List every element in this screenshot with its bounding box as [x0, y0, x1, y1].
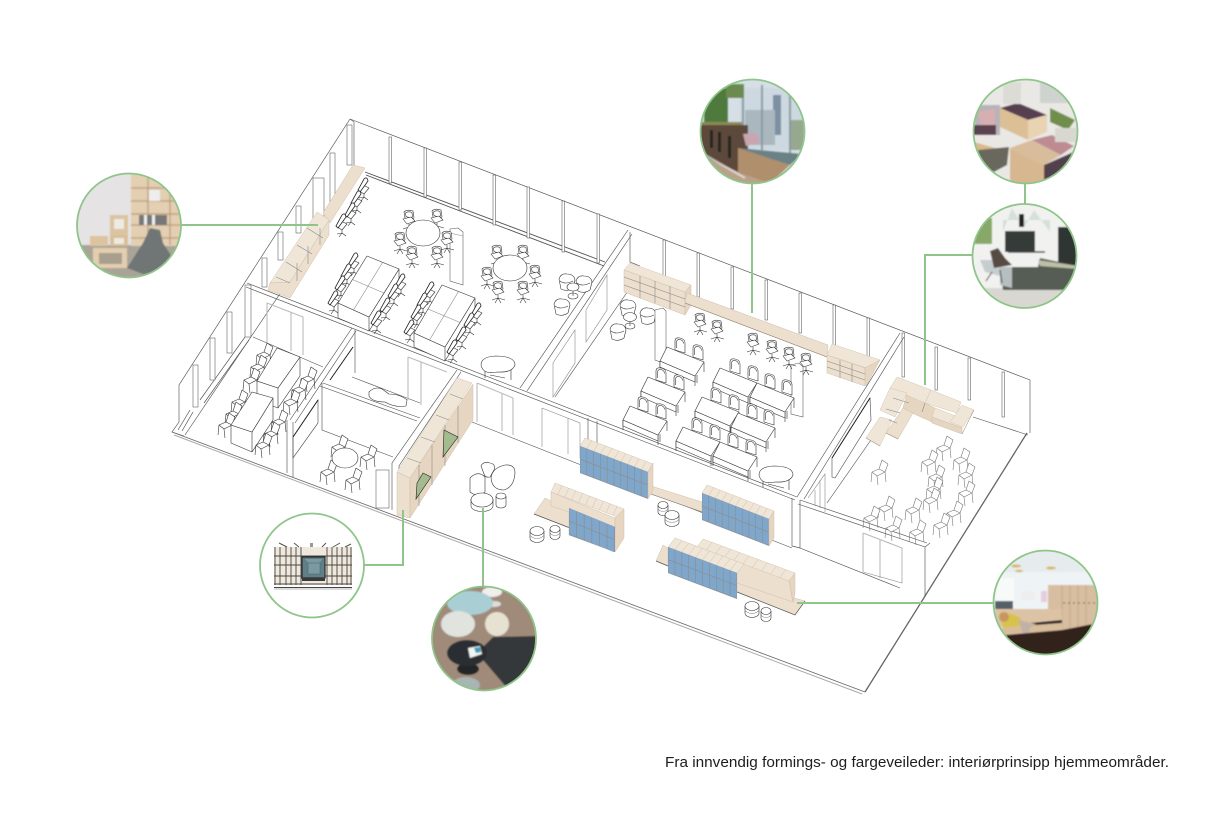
- strip bench between lockers: [648, 485, 702, 512]
- connector lines: [181, 183, 1025, 603]
- outer walls and floor edge: [172, 119, 1030, 694]
- oval table room 2: [759, 466, 793, 490]
- round table B with chairs: [481, 245, 542, 303]
- column room 1: [450, 228, 463, 285]
- room 2 wood cabinet left: [624, 263, 691, 315]
- photo: bookcase and bean bag: [76, 172, 182, 278]
- wood storage wall with green windows: [397, 378, 473, 518]
- locker block 1: [580, 438, 653, 499]
- task chairs room 2: [694, 313, 813, 375]
- room 2 wood cabinet right: [827, 344, 880, 386]
- photo: person on bench by lockers: [992, 550, 1100, 660]
- facade panel: [274, 543, 352, 589]
- window mullions: [193, 125, 1004, 417]
- floor plan: isometric drawing of the home area: [172, 119, 1030, 694]
- locker block 4 with bench: [656, 538, 805, 615]
- long table 1 with chairs: [328, 253, 406, 334]
- photo: workstation with green seating: [970, 202, 1080, 312]
- meeting room sofa: [369, 388, 407, 406]
- illustration: facade with window: [260, 514, 364, 618]
- room 2 window bench: [685, 293, 828, 357]
- doors and whiteboards: [267, 275, 902, 583]
- room 2 columns: [655, 308, 803, 417]
- photo: poufs and small table: [430, 585, 540, 693]
- round table A with chairs: [394, 209, 454, 268]
- photo: wooden seating boxes with cushions: [970, 78, 1082, 186]
- desks room 2: [623, 338, 794, 481]
- hall pouf group: [470, 462, 515, 512]
- cylindrical stools: [530, 502, 771, 622]
- oval table room 1: [481, 356, 515, 380]
- locker block 3 with bench: [534, 483, 624, 552]
- caption: Fra innvendig formings- og fargeveileder: interiørprinsipp hjemmeområder.: [665, 755, 1169, 771]
- photo: window bench with city view: [700, 78, 806, 186]
- left room tables and chairs: [218, 343, 317, 458]
- locker block 2: [702, 485, 774, 546]
- wood strip and bookcase in left room: [268, 165, 365, 298]
- room 3 circle of chairs: [863, 436, 975, 545]
- long table 2 with chairs: [404, 282, 482, 363]
- room 3 wood stepped seating: [866, 377, 974, 446]
- room 2 lounge group: [610, 300, 656, 340]
- small meeting room table: [320, 435, 377, 493]
- row of task chairs along strip: [336, 178, 369, 237]
- lounge group room 1: [554, 274, 592, 315]
- interior walls: [246, 230, 930, 597]
